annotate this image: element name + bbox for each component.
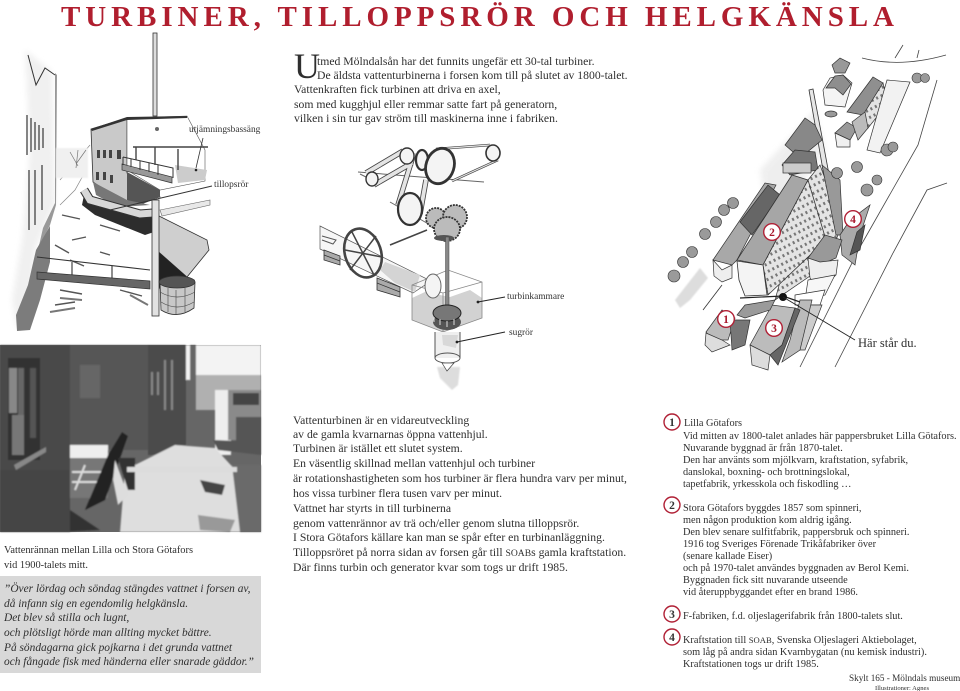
quote box [0,576,261,673]
middle text column: I Stora Götafors källare kan man se spår efter en turbinanläggning. [293,531,605,544]
you are here marker [779,293,787,301]
runner [433,314,461,330]
quote box: då infann sig en egendomlig helgkänsla. [4,598,188,610]
legend item 2: och på 1970-talet användes byggnaden av Berol Kemi. [683,563,909,574]
draft tube [435,332,460,358]
marker 4 [845,211,861,227]
legend item 1 [664,414,957,490]
legend item 4 [664,629,927,670]
top houses [823,58,910,153]
middle text column: hos vissa turbiner flera tusen varv per minut. [293,487,502,500]
legend item 4: som låg på andra sidan Kvarnbygatan (nu kemisk industri). [683,647,927,658]
intro text [294,46,628,125]
middle text column: Tilloppsröret på norra sidan av forsen går till SOABs gamla kraftstation. [293,546,626,559]
legend item 2: 1916 tog Sveriges Förenade Trikåfabriker över [683,539,877,550]
intro text: tmed Mölndalsån har det funnits ungefär ett 30-tal turbiner. [317,55,595,68]
photo caption [4,545,193,571]
gears [426,205,467,241]
wheel [338,224,388,282]
building [91,118,160,205]
bridge [37,257,150,285]
turbine chamber [412,290,482,332]
quote box: På söndagarna gick pojkarna i det grunda vattnet [3,642,233,654]
label: Här står du: Här står du. [858,336,917,350]
illustration: turbine house and penstock [12,33,212,331]
leaders [478,297,505,302]
intro text: De äldsta vattenturbinerna i forsen kom till på slutet av 1800-talet. [317,69,628,82]
legend item 2 [664,497,909,598]
middle text column: Turbinen är istället ett slutet system. [293,442,463,455]
middle text column: genom vattenrännor av trä och/eller genom slutna tilloppsrör. [293,517,579,530]
pipe [320,226,431,293]
legend item 1: Vid mitten av 1800-talet anlades här pappersbruket Lilla Götafors. [683,431,957,442]
photo caption: Vattenrännan mellan Lilla och Stora Götafors [4,545,193,556]
legend item 3 [664,606,903,622]
label: utjämningsbassäng: utjämningsbassäng [189,125,261,135]
quote box: och fångade fisk med händerna eller snarade gäddor.” [4,656,254,668]
river and road lines [800,45,947,367]
middle text column: En väsentlig skillnad mellan vattenhjul och turbiner [293,457,535,470]
leader: utjämningsbassäng [196,138,203,168]
illustration: turbine mechanism diagram [320,145,505,390]
legend item 4: 4 [669,632,675,644]
legend item 1: tapetfabrik, yrkesskola och fiskodling … [683,479,851,490]
middle text column: Vattnet har styrts in till turbinerna [293,502,452,515]
quote box: och plötsligt hörde man allting mycket bättre. [4,627,212,639]
marker 3: 3 [771,323,777,335]
intro text: vilken i sin tur gav ström till maskinerna inne i fabriken. [294,112,558,125]
building 2 [737,175,826,296]
legend item 4: Kraftstationen togs ur drift 1985. [683,659,819,670]
river [50,205,155,320]
chimney [809,89,840,233]
legend item 2: vid återuppbyggandet efter en brand 1986. [683,587,858,598]
label: sugrör: sugrör [509,328,534,338]
marker 2 [764,224,780,240]
marker 1: 1 [723,314,729,326]
title: TURBINER, TILLOPPSRÖR OCH HELGKÄNSLA [61,1,894,33]
marker 4: 4 [850,214,856,226]
legend item 1: Nuvarande byggnad är från 1870-talet. [683,443,843,454]
legend item 2: 2 [669,500,675,512]
legend item 1: Den har använts som mjölkvarn, kraftstation, syfabrik, [683,455,908,466]
middle text column [293,414,627,574]
legend item 2: Stora Götafors byggdes 1857 som spinneri, [683,503,861,514]
legend item 4: Kraftstation till SOAB, Svenska Oljeslageri Aktiebolaget, [683,635,917,646]
quote box: ”Över lördag och söndag stängdes vattnet i forsen av, [4,583,251,595]
photo caption: vid 1900-talets mitt. [4,560,88,571]
credits [849,673,960,691]
legend item 2: Den blev senare sulfitfabrik, pappersbruk och spinneri. [683,527,909,538]
shaft [446,237,449,309]
middle text column: Där finns turbin och generator kvar som togs ur drift 1985. [293,561,568,574]
intro text: som med kugghjul eller remmar satte fart på generatorn, [294,98,557,111]
outflow [437,367,460,390]
marker 2: 2 [769,227,775,239]
legend item 2: (senare kallade Eiser) [683,551,772,562]
quote box: Det blev så stilla och lugnt, [3,612,129,624]
legend item 1: danslokal, boxning- och brottningslokal, [683,467,850,478]
barrel [160,276,195,315]
middle text column: är rotationshastigheten som hos turbiner är flera hundra varv per minut, [293,472,627,485]
illustration: aerial view of mill area [668,45,947,370]
credits: Skylt 165 - Mölndals museum [849,673,960,683]
belts and pulleys [366,145,498,214]
legend item 2: men någon produktion kom aldrig igång. [683,515,852,526]
back building and tower [775,118,843,300]
marker 1 [718,311,734,327]
legend item 1: 1 [669,417,675,429]
right-side blocks [782,205,870,362]
long row [847,77,883,115]
legend item 1: Lilla Götafors [684,418,742,429]
left long hall [713,183,780,282]
legend item 3: F-fabriken, f.d. oljeslagerifabrik från 1800-talets slut. [683,611,903,622]
middle text column: Vattenturbinen är en vidareutveckling [293,414,469,427]
legend item 3: 3 [669,609,675,621]
brick piers [324,250,400,297]
drop cap: U [294,46,320,86]
shafts [358,172,484,226]
legend item 2: Byggnaden fick sitt nuvarande utseende [683,575,848,586]
shadow strip [675,268,708,308]
middle text column: av de gamla kvarnarnas öppna vattenhjul. [293,428,488,441]
label: tillopsrör: tillopsrör [214,180,249,190]
trees [668,73,930,282]
garden [867,80,910,153]
building 3 area [705,300,800,370]
chimney [153,33,157,116]
label: turbinkammare: turbinkammare [507,292,564,302]
marker 3 [766,320,782,336]
photo: water channel between buildings [0,345,261,532]
pipe [84,190,153,214]
intro text: Vattenkraften fick turbinen att driva en axel, [294,83,501,96]
post and ramp [153,213,209,277]
